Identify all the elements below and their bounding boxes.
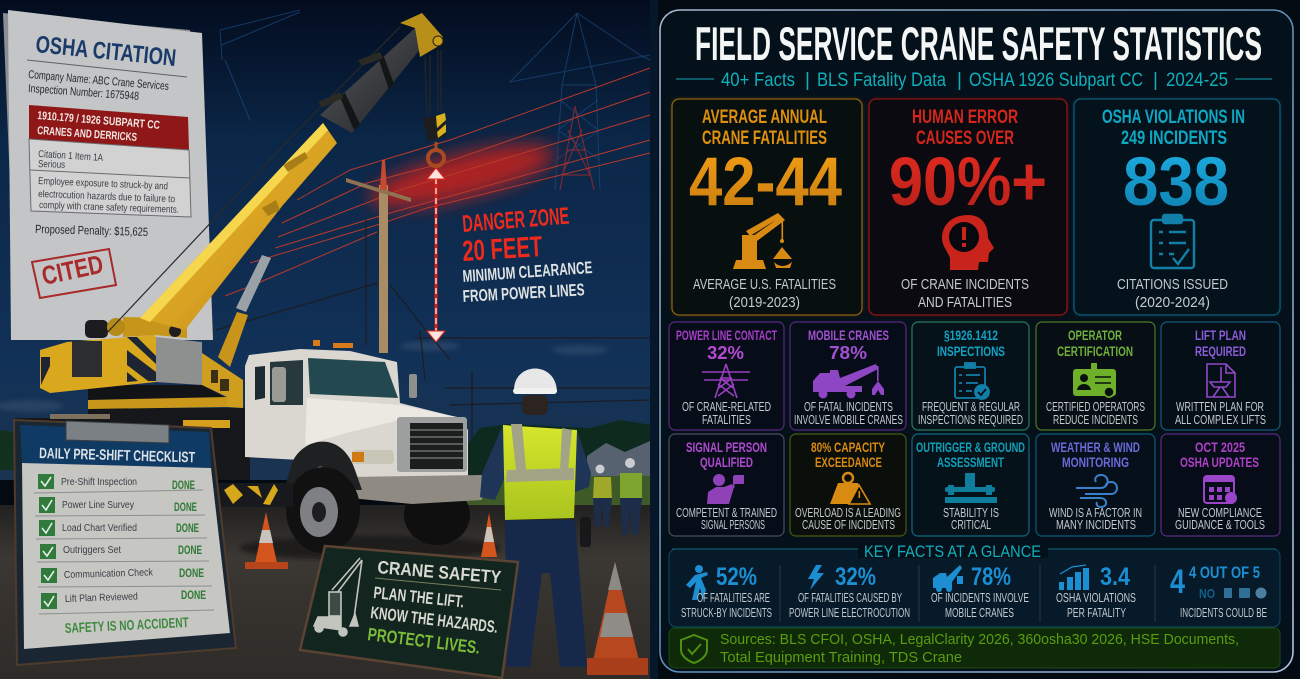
fact: electrocution: 32% — [835, 563, 876, 591]
sources bar — [669, 628, 1280, 668]
subtitle strip: | — [805, 70, 810, 91]
fact: electrocution — [789, 563, 910, 620]
card: October 2025 OSHA updates — [1161, 434, 1280, 536]
red regulation banner: CRANES AND DERRICKS — [37, 125, 138, 144]
card: inspections: INSPECTIONS REQUIRED — [918, 413, 1023, 427]
card: signal person — [669, 434, 784, 536]
yellow section — [140, 123, 337, 330]
cited stamp: CITED — [39, 249, 106, 291]
card: signal person: SIGNAL PERSONS — [701, 518, 765, 532]
checklist rows: Load Chart Verified — [62, 523, 137, 534]
checklist rows: DONE — [174, 502, 197, 514]
chassis — [15, 408, 250, 480]
card: mobile cranes: OF FATAL INCIDENTS — [804, 400, 893, 414]
card: lift plan required: LIFT PLAN — [1195, 328, 1246, 343]
panel: statistics — [660, 10, 1293, 672]
company details: Company Name: ABC Crane Services — [28, 69, 169, 93]
icon: calendar — [1204, 476, 1237, 504]
clearance arrow — [427, 168, 445, 342]
panel edge strip — [650, 0, 658, 679]
trees and horizon — [467, 420, 652, 480]
card: inspections: FREQUENT & REGULAR — [922, 400, 1020, 414]
stat card: human error: AND FATALITIES — [918, 294, 1012, 311]
card: inspections: §1926.1412 — [944, 328, 998, 343]
icon: wind — [1076, 475, 1117, 507]
key facts strip — [669, 542, 1280, 627]
fact: struck-by: OF FATALITIES ARE — [697, 591, 770, 605]
heading: OSHA VIOLATIONS IN — [1102, 107, 1245, 128]
danger zone label: FROM POWER LINES — [462, 280, 585, 306]
checklist rows: DONE — [181, 590, 206, 602]
card: operator certification: REDUCE INCIDENTS — [1053, 413, 1138, 427]
checklist rows: DONE — [178, 545, 202, 557]
fact: struck-by: STRUCK-BY INCIDENTS — [681, 606, 772, 620]
faint background crane and tower blueprint — [220, 10, 650, 190]
fact: four out of five: NO — [1199, 586, 1215, 601]
icon: checklist badge — [955, 363, 989, 399]
fact: electrocution: POWER LINE ELECTROCUTION — [789, 606, 910, 620]
caption: AVERAGE U.S. FATALITIES — [693, 276, 836, 293]
card: mobile cranes: MOBILE CRANES — [808, 328, 889, 343]
fact: struck-by: 52% — [716, 563, 757, 591]
power lines — [225, 68, 650, 296]
card: capacity exceedance: EXCEEDANCE — [815, 455, 882, 470]
document title: OSHA CITATION — [34, 31, 177, 72]
card: operator certification: CERTIFICATION — [1057, 344, 1133, 359]
card: mobile cranes — [790, 322, 906, 430]
checklist rows: DONE — [179, 568, 204, 580]
truck — [245, 340, 482, 553]
proposed penalty: Proposed Penalty: $15,625 — [35, 222, 148, 239]
citation table: comply with crane safety requirements. — [39, 200, 179, 216]
citation table: Serious — [38, 159, 65, 171]
card: inspections — [912, 322, 1029, 430]
subtitle strip: 2024-25 — [1166, 70, 1228, 91]
icon: overload weight — [830, 473, 870, 504]
card: lift plan required: ALL COMPLEX LIFTS — [1175, 413, 1266, 427]
card: outrigger and ground assessment: STABILITY IS — [943, 506, 999, 520]
stat card: human error: CAUSES OVER — [916, 128, 1014, 149]
fact: struck-by — [681, 563, 772, 620]
red regulation banner — [29, 105, 189, 150]
clipboard: daily pre-shift checklist — [14, 420, 236, 665]
card: power line contact — [669, 322, 784, 430]
stat card: OSHA violations: (2020-2024) — [1135, 294, 1210, 311]
stat card: average annual crane fatalities: CRANE FATALITIES — [702, 128, 827, 149]
truck ground shadow — [240, 536, 500, 560]
card: outrigger and ground assessment: CRITICAL — [951, 518, 991, 532]
checklist rows: DONE — [176, 523, 199, 535]
turntable and rail — [88, 385, 230, 402]
card: mobile cranes: 78% — [829, 343, 867, 363]
card: weather and wind monitoring: WEATHER & WIND — [1051, 440, 1140, 455]
card: October 2025 OSHA updates: OSHA UPDATES — [1180, 455, 1259, 470]
subtitle strip: 40+ Facts — [721, 70, 795, 91]
citation table: Citation 1 Item 1A — [38, 149, 104, 164]
OSHA citation document — [3, 10, 213, 340]
boom foot and winch — [123, 317, 187, 338]
clipboard clip — [66, 421, 169, 443]
value: 42-44 — [689, 143, 842, 220]
sign text: CRANE SAFETY — [377, 557, 502, 587]
value: 90%+ — [889, 143, 1047, 220]
icon: outrigger — [945, 473, 997, 503]
card: lift plan required: WRITTEN PLAN FOR — [1176, 400, 1264, 414]
fact: violations per fatality: OSHA VIOLATIONS — [1056, 591, 1136, 605]
crane safety sign: PLAN THE LIFT. — [373, 583, 465, 611]
sky — [0, 0, 652, 480]
icon: crane — [733, 213, 792, 269]
red regulation banner: 1910.179 / 1926 SUBPART CC — [37, 110, 160, 132]
heading: HUMAN ERROR — [912, 107, 1018, 128]
sources bar: Total Equipment Training, TDS Crane — [720, 649, 962, 666]
outrigger beam — [215, 483, 293, 507]
stat card: human error — [869, 99, 1067, 315]
card: outrigger and ground assessment: OUTRIGGER & GROUND — [916, 440, 1025, 455]
card: capacity exceedance — [790, 434, 906, 536]
paper stack — [3, 13, 205, 330]
checklist title: DAILY PRE-SHIFT CHECKLIST — [39, 445, 195, 466]
card: October 2025 OSHA updates: OCT 2025 — [1195, 440, 1245, 455]
checklist rows: Communication Check — [64, 567, 154, 581]
card: operator certification — [1036, 322, 1155, 430]
boom head — [400, 13, 443, 57]
luffing cylinder — [236, 255, 271, 312]
card: signal person: SIGNAL PERSON — [686, 440, 767, 455]
card: capacity exceedance: CAUSE OF INCIDENTS — [802, 518, 895, 532]
icon: clipboard — [1151, 215, 1194, 268]
checklist rows: Outriggers Set — [63, 545, 121, 556]
danger heading: DANGER ZONE — [461, 203, 570, 238]
card: power line contact: POWER LINE CONTACT — [676, 328, 777, 343]
fact: violations per fatality: PER FATALITY — [1067, 606, 1126, 620]
fact: mobile cranes: 78% — [971, 563, 1011, 591]
card: weather and wind monitoring: MANY INCIDENTS — [1056, 518, 1136, 532]
card: inspections: INSPECTIONS — [937, 344, 1005, 359]
card: operator certification: CERTIFIED OPERATORS — [1046, 400, 1145, 414]
fact: mobile cranes — [931, 563, 1029, 620]
subtitle strip: | — [957, 70, 962, 91]
card: power line contact: 32% — [707, 343, 744, 363]
subtitle strip: BLS Fatality Data — [817, 70, 946, 91]
fact: electrocution: OF FATALITIES CAUSED BY — [798, 591, 902, 605]
grass — [465, 476, 652, 510]
pole and cross-arm — [216, 160, 650, 440]
crane safety sign — [300, 546, 518, 678]
crane safety sign: KNOW THE HAZARDS. — [370, 603, 499, 637]
checklist rows — [34, 474, 214, 614]
fact: violations per fatality: 3.4 — [1100, 563, 1130, 591]
icon: pylon — [702, 364, 750, 398]
subtitle strip — [676, 70, 1272, 91]
icon: plan document — [1207, 364, 1235, 397]
card: power line contact: OF CRANE-RELATED — [682, 400, 771, 414]
card: weather and wind monitoring: WIND IS A FACTOR IN — [1049, 506, 1142, 520]
stat card: average annual crane fatalities: (2019-2023) — [729, 294, 800, 311]
icon: mobile crane — [813, 364, 884, 398]
card: October 2025 OSHA updates: GUIDANCE & TOOLS — [1175, 518, 1265, 532]
checklist rows: DONE — [172, 480, 195, 492]
card: power line contact: FATALITIES — [702, 413, 751, 427]
icon: ID card — [1073, 363, 1116, 397]
card: signal person: QUALIFIED — [700, 455, 753, 470]
card: lift plan required: REQUIRED — [1195, 344, 1246, 359]
panel: photo scene — [0, 0, 658, 679]
danger zone label — [461, 203, 593, 306]
subtitle strip: | — [1153, 70, 1158, 91]
value: 838 — [1123, 143, 1229, 220]
steel section — [320, 28, 422, 133]
card: capacity exceedance: 80% CAPACITY — [811, 440, 885, 455]
card: outrigger and ground assessment: ASSESSMENT — [937, 455, 1005, 470]
fact: four out of five: 4 OUT OF 5 — [1189, 563, 1260, 582]
fact: four out of five: 4 — [1170, 563, 1185, 601]
card: operator certification: OPERATOR — [1068, 328, 1122, 343]
caption: CITATIONS ISSUED — [1117, 276, 1228, 293]
stat card: OSHA violations — [1074, 99, 1280, 315]
foreground supervisor — [480, 368, 591, 667]
card: signal person: COMPETENT & TRAINED — [676, 506, 777, 520]
card: lift plan required — [1161, 322, 1280, 430]
checklist rows: Lift Plan Reviewed — [65, 591, 138, 605]
stat card: average annual crane fatalities — [672, 99, 862, 315]
icon: shield check — [681, 635, 707, 663]
card: October 2025 OSHA updates: NEW COMPLIANCE — [1178, 506, 1262, 520]
card: capacity exceedance: OVERLOAD IS A LEADING — [795, 506, 901, 520]
fact: mobile cranes: OF INCIDENTS INVOLVE — [931, 591, 1029, 605]
OSHA citation document: Inspection Number: 1675948 — [28, 83, 139, 103]
sign crane icon — [314, 558, 362, 636]
checklist rows: Power Line Survey — [62, 500, 134, 511]
traffic cones — [245, 512, 648, 675]
subtitle strip: OSHA 1926 Subpart CC — [969, 70, 1143, 91]
crane safety sign: PROTECT LIVES. — [367, 624, 481, 658]
distant building — [587, 441, 650, 478]
danger zone glow — [364, 132, 560, 220]
clearance note: MINIMUM CLEARANCE — [462, 258, 593, 286]
key facts heading: KEY FACTS AT A GLANCE — [864, 542, 1041, 561]
card: weather and wind monitoring: MONITORING — [1062, 455, 1129, 470]
telescopic boom — [105, 13, 443, 367]
fact: four out of five — [1170, 563, 1267, 620]
fact: violations per fatality — [1056, 563, 1136, 620]
ground — [0, 505, 652, 679]
fact: mobile cranes: MOBILE CRANES — [945, 606, 1014, 620]
superstructure — [202, 353, 243, 408]
distant workers — [593, 458, 642, 535]
citation table — [29, 139, 191, 217]
heading: AVERAGE ANNUAL — [702, 107, 827, 128]
clouds — [0, 341, 608, 412]
stat card: OSHA violations: 249 INCIDENTS — [1121, 128, 1227, 149]
hook block and hoist ropes — [423, 50, 446, 166]
icon: signal person — [707, 474, 744, 504]
cited stamp — [32, 249, 116, 298]
crane carrier deck — [15, 317, 250, 480]
checklist slogan: SAFETY IS NO ACCIDENT — [64, 614, 189, 636]
card: weather and wind monitoring — [1036, 434, 1155, 536]
citation table: Employee exposure to struck-by and — [38, 176, 168, 192]
icon: head with alert — [942, 215, 994, 270]
clearance distance: 20 FEET — [461, 231, 543, 268]
sources text: Sources: BLS CFOI, OSHA, LegalClarity 2026, 360osha30 2026, HSE Documents, — [720, 631, 1239, 648]
card: mobile cranes: INVOLVE MOBILE CRANES — [794, 413, 903, 427]
citation table: electrocution hazards due to failure to — [38, 189, 176, 205]
checklist rows: Pre-Shift Inspection — [61, 477, 137, 488]
card: outrigger and ground assessment — [912, 434, 1029, 536]
red tower silhouette — [560, 106, 594, 190]
caption: OF CRANE INCIDENTS — [901, 276, 1029, 293]
